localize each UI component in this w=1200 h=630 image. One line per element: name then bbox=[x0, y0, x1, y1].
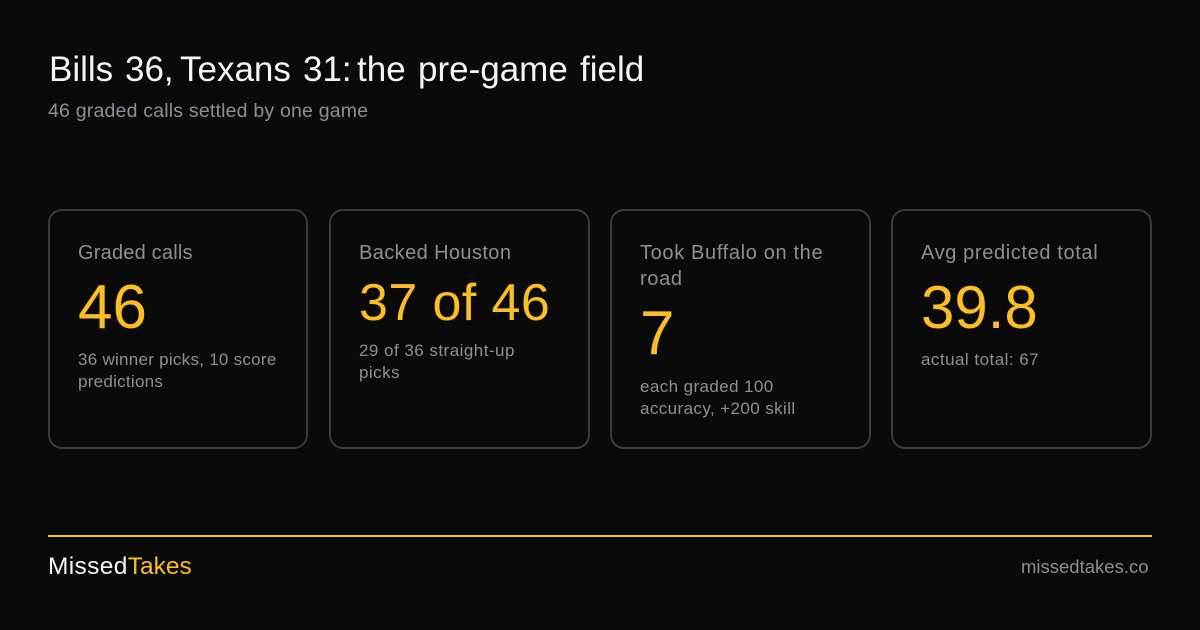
footer rule bbox=[48, 535, 1152, 537]
site url: missedtakes.co bbox=[1021, 556, 1148, 577]
brand wordmark: MissedTakes bbox=[48, 553, 192, 580]
note: actual total: actual total: 67 bbox=[921, 350, 1039, 369]
note: backed Houston bbox=[359, 341, 515, 382]
title: the bbox=[357, 50, 406, 89]
note: backed Houston: picks bbox=[359, 363, 400, 382]
label: backed Houston: Backed Houston bbox=[359, 242, 511, 264]
value: 39.8: 39.8 bbox=[921, 274, 1038, 341]
value: 7: 7 bbox=[640, 299, 674, 368]
label: avg predicted total: Avg predicted total bbox=[921, 242, 1098, 264]
title: 31: bbox=[303, 50, 352, 89]
value: 46: 46 bbox=[78, 273, 147, 342]
title: Bills bbox=[49, 50, 113, 89]
panel: took Buffalo bbox=[610, 209, 871, 449]
note: took Buffalo bbox=[640, 377, 796, 418]
note: took Buffalo: each graded 100 bbox=[640, 377, 774, 396]
note: graded calls: predictions bbox=[78, 372, 163, 391]
title: Texans bbox=[180, 50, 291, 89]
title: 36, bbox=[125, 50, 174, 89]
title: field bbox=[580, 50, 644, 89]
panel: avg predicted total bbox=[891, 209, 1152, 449]
subtitle: 46 graded calls settled by one game bbox=[48, 100, 368, 122]
title bbox=[49, 50, 644, 89]
note: backed Houston: 29 of 36 straight-up bbox=[359, 341, 515, 360]
panel: graded calls bbox=[48, 209, 308, 449]
note: graded calls bbox=[78, 350, 277, 391]
label: took Buffalo bbox=[640, 242, 823, 290]
label: took Buffalo: Took Buffalo on the bbox=[640, 242, 823, 264]
note: took Buffalo: accuracy, +200 skill bbox=[640, 399, 796, 418]
note: graded calls: 36 winner picks, 10 score bbox=[78, 350, 277, 369]
label: took Buffalo: road bbox=[640, 268, 683, 290]
value: 37 of 46: 37 of 46 bbox=[359, 274, 550, 332]
panel: backed Houston bbox=[329, 209, 590, 449]
label: graded calls: Graded calls bbox=[78, 242, 193, 264]
title: pre-game bbox=[418, 50, 568, 89]
